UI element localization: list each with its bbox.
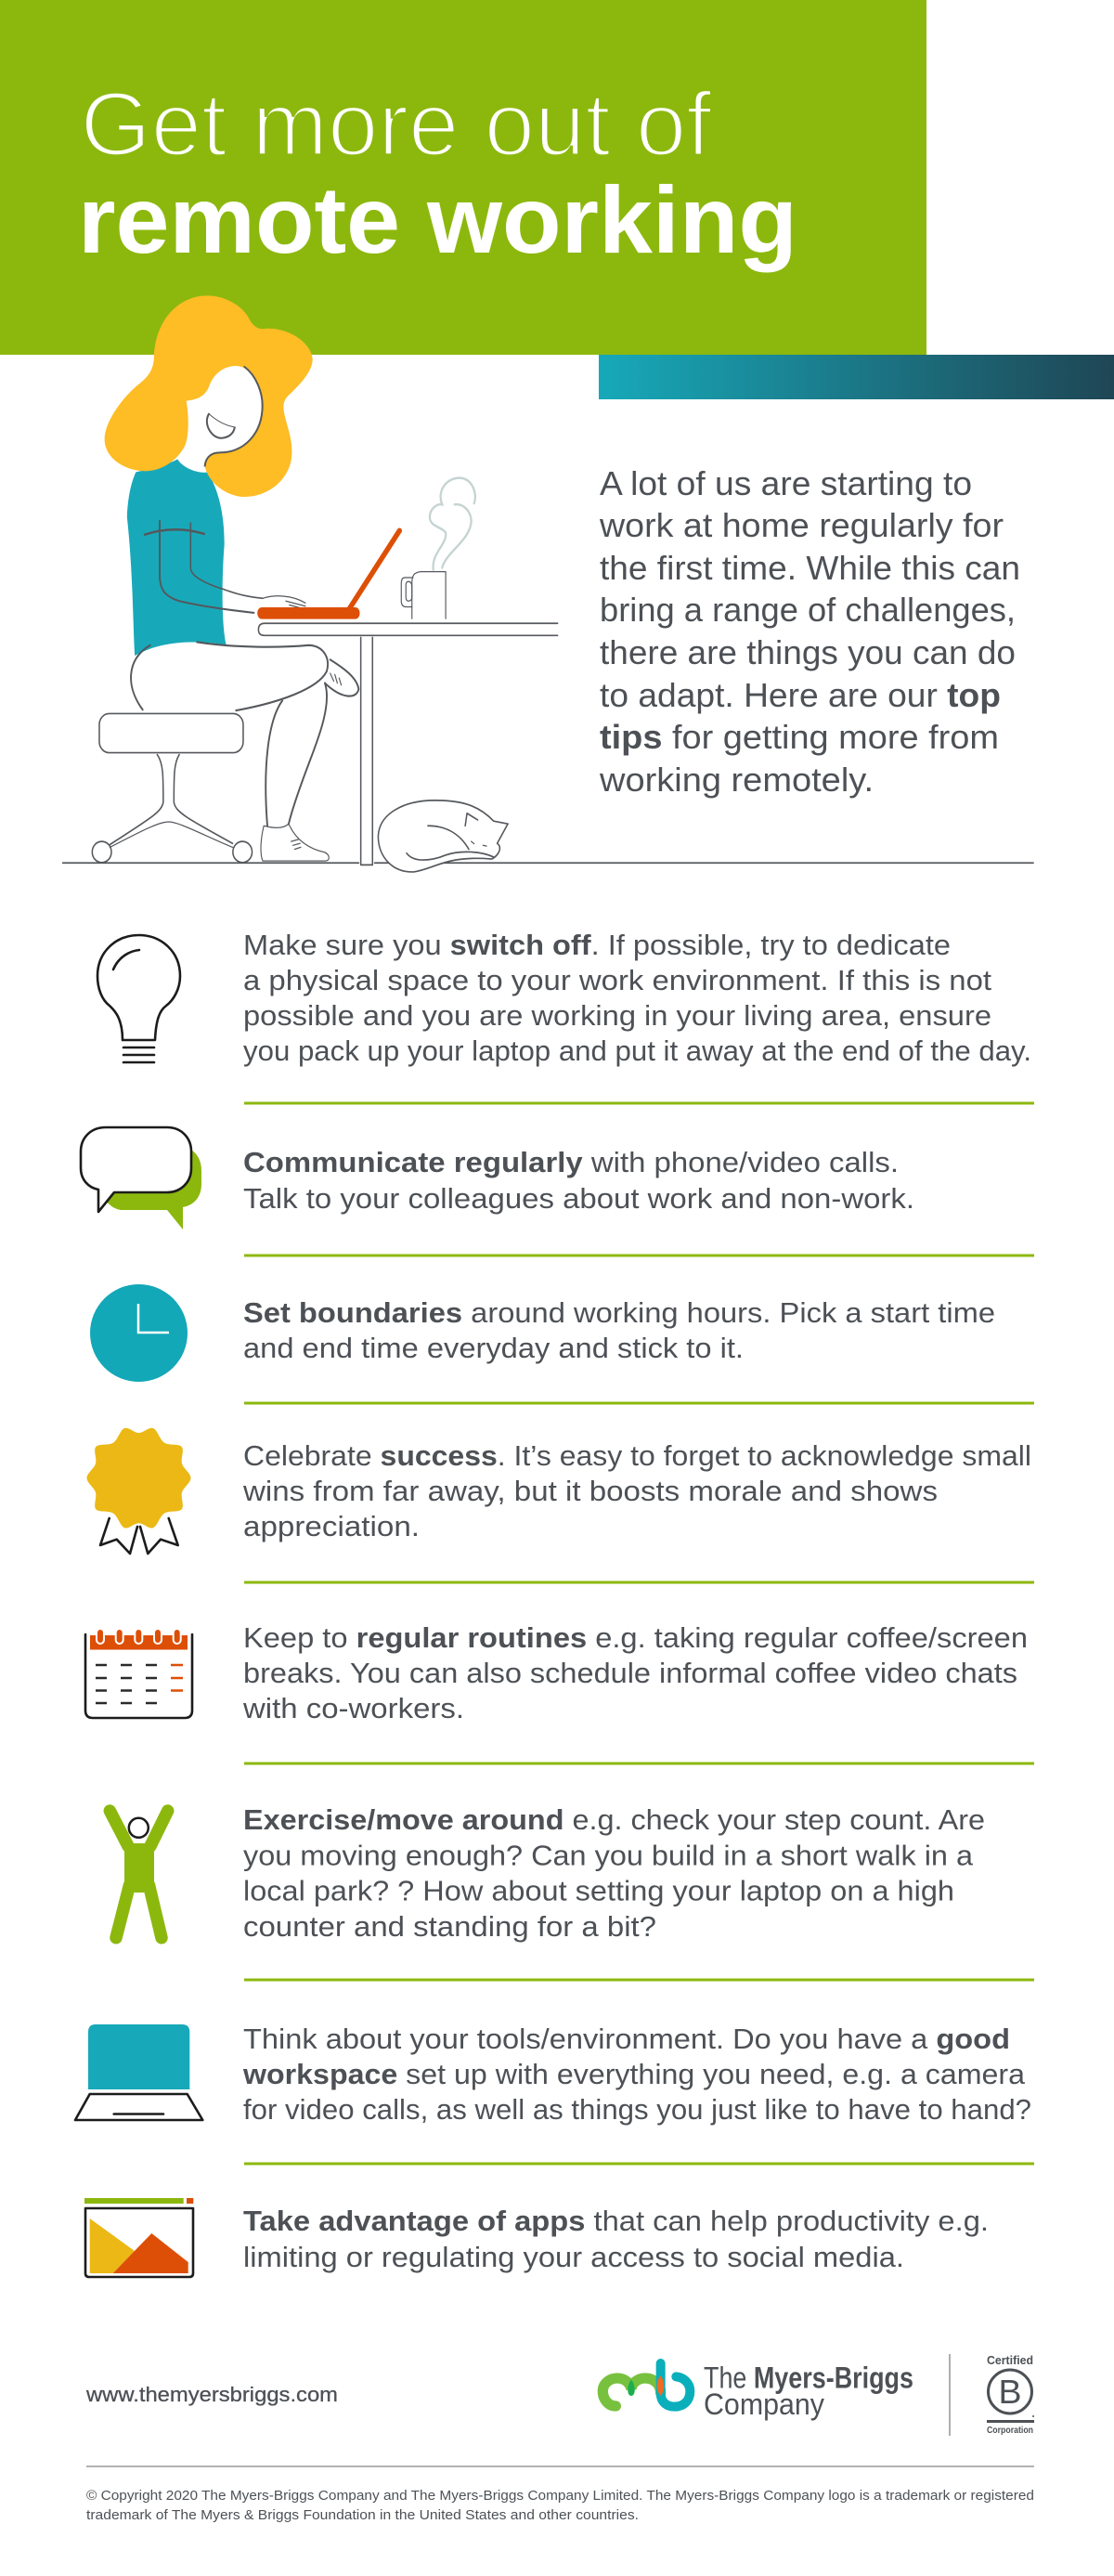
intro text: work at home regularly for [599,506,1004,544]
tip 4: success: appreciation. [243,1511,420,1542]
tip 4: success: Celebrate success. It’s easy to forget to acknowledge small [243,1440,1031,1472]
cat [378,800,508,872]
icon: award rosette [87,1428,191,1554]
copyright [86,2488,1034,2523]
tip 1: switch off [243,930,1031,1067]
header panel [0,0,926,355]
tip 8: apps [243,2205,989,2273]
tip 5: routines: Keep to regular routines e.g. taking regular coffee/screen [243,1622,1028,1654]
tip 2: communicate: Talk to your colleagues about work and non-work. [243,1183,914,1215]
logo: The Myers-Briggs Company: Company [704,2387,824,2421]
intro text: A lot of us are starting to [600,464,972,502]
tip 7: workspace: workspace set up with everything you need, e.g. a camera [242,2059,1025,2090]
title: Get more out of [80,73,713,175]
intro text: tips for getting more from [600,718,999,756]
tip 7: workspace [242,2023,1031,2126]
steam [430,478,475,570]
tip 8: apps: Take advantage of apps that can help productivity e.g. [243,2205,989,2237]
tip 3: boundaries: Set boundaries around working hours. Pick a start time [243,1297,995,1329]
floor line [63,861,1033,865]
icon: app window [84,2198,193,2277]
intro text: bring a range of challenges, [600,591,1016,629]
icon: light bulb [97,935,180,1062]
tip 4: success [242,1440,1031,1542]
tip 5: routines: breaks. You can also schedule informal coffee video chats [243,1658,1017,1689]
icon: laptop [75,2024,202,2120]
tip 1: switch off: possible and you are working in your living area, ensure [243,1000,991,1032]
logo: certified B corporation: Certified [987,2354,1033,2367]
tip 1: switch off: Make sure you switch off . If possible, try to dedicate [243,930,951,961]
tip 6: exercise: Exercise/move around e.g. check your step count. Are [243,1804,985,1836]
tip 6: exercise: local park? ? How about setting your laptop on a high [243,1876,954,1907]
copyright: trademark of The Myers & Briggs Foundation in the United States and other countries. [86,2507,639,2523]
tip 7: workspace: Think about your tools/environment. Do you have a good [243,2023,1010,2055]
arms and hands [145,521,305,613]
logo: certified B corporation: Corporation [987,2425,1033,2436]
tip 3: boundaries: and end time everyday and stick to it. [243,1333,744,1364]
logo: certified B corporation: B [999,2373,1021,2411]
tip 5: routines [242,1622,1028,1724]
copyright: © Copyright 2020 The Myers-Briggs Company and The Myers-Briggs Company Limited. The Myers-Briggs Company logo is a trademark or registered [86,2488,1034,2504]
tip 4: success: wins from far away, but it boosts morale and shows [242,1476,938,1507]
intro text: there are things you can do [600,633,1016,671]
icon: speech bubbles [81,1127,201,1229]
logo: certified B corporation [987,2354,1034,2436]
tip 2: communicate [243,1147,914,1215]
tip 6: exercise [243,1804,985,1943]
hair, face and eye [105,295,313,497]
gradient bar [599,355,1114,399]
tip 5: routines: with co-workers. [242,1693,464,1724]
tip 6: exercise: counter and standing for a bit? [243,1911,656,1943]
legs [131,642,358,861]
tip 1: switch off: you pack up your laptop and put it away at the end of the day. [243,1035,1031,1067]
icon: clock [90,1284,188,1382]
tip 7: workspace: for video calls, as well as things you just like to have to hand? [243,2094,1031,2126]
tip 8: apps: limiting or regulating your access to social media. [243,2242,904,2273]
illustration: woman working at a desk with cat [63,295,1033,872]
table [258,623,558,865]
icon: exercising person [110,1811,168,1938]
shirt [127,459,227,656]
mug [401,572,446,618]
website: www.themyersbriggs.com [85,2383,338,2406]
laptop [257,530,399,619]
stool [92,713,253,863]
tip 2: communicate: Communicate regularly with phone/video calls. [243,1147,899,1178]
logo: The Myers-Briggs Company: The Myers-Briggs [704,2361,913,2395]
tip 3: boundaries [243,1297,995,1364]
title [78,73,797,273]
title: remote working [78,167,797,273]
tip 1: switch off: a physical space to your work environment. If this is not [243,965,992,996]
intro text: working remotely. [599,761,874,799]
tip 6: exercise: you moving enough? Can you build in a short walk in a [243,1841,973,1872]
intro text: the first time. While this can [600,549,1020,587]
intro text [599,464,1020,799]
intro text: to adapt. Here are our top [600,676,1001,714]
logo: The Myers-Briggs Company [602,2361,913,2421]
icon: calendar [85,1629,192,1718]
